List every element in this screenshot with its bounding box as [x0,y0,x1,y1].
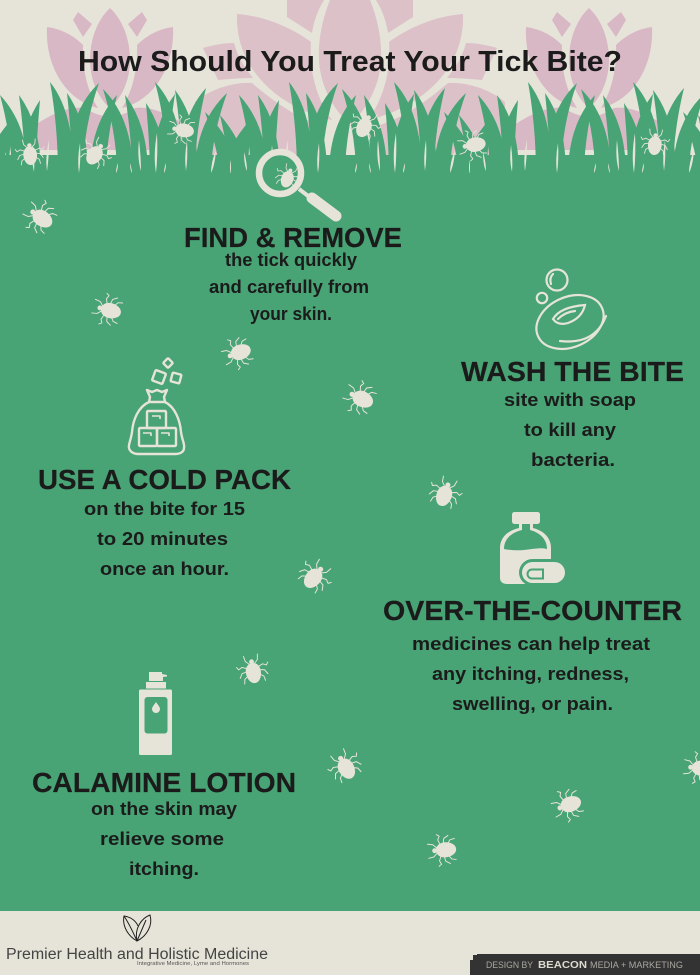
panel: calamine lotion [32,672,296,879]
designer credit bar: DESIGN BY [486,960,533,970]
title: How Should You Treat Your Tick Bite? [78,46,622,78]
lotus centre [195,0,505,175]
text block: medicines can help treat [412,634,650,654]
icon: ice bag [129,358,184,454]
footer band [0,911,700,975]
text block: and carefully from [209,277,369,297]
text block: the tick quickly [225,250,357,270]
icon: soap and bubbles [528,270,612,359]
text block [209,250,369,324]
text block: relieve some [100,829,224,849]
panel: wash the bite [461,270,684,470]
grass [0,82,700,178]
text block: on the skin may [91,799,237,819]
text block: on the bite for 15 [84,499,245,519]
text block [84,499,245,579]
text block: swelling, or pain. [452,694,613,714]
icon: magnifying glass [259,152,336,216]
icon: medicine bottle and pill [500,512,568,586]
clinic name: Premier Health and Holistic Medicine [6,946,268,963]
designer credit bar [470,953,700,975]
heading: OVER-THE-COUNTER [383,595,682,626]
lotus left [35,8,185,150]
text block: itching. [129,859,199,879]
icon: leaf logo [124,915,151,941]
text block: to 20 minutes [97,529,228,549]
heading: USE A COLD PACK [38,464,291,495]
designer credit bar: MEDIA + MARKETING [590,960,683,970]
icon: lotion bottle [139,672,172,755]
text block [412,634,650,714]
clinic tagline: Integrative Medicine, Lyme and Hormones [137,961,250,967]
heading: FIND & REMOVE [184,222,402,253]
heading: WASH THE BITE [461,356,684,387]
text block [504,390,636,470]
panel: find and remove [184,152,402,324]
text block: any itching, redness, [432,664,629,684]
green field [0,173,700,911]
text block: to kill any [524,420,616,440]
panel: over-the-counter [383,512,682,714]
footer logo [6,915,268,967]
scattered ticks [14,105,700,867]
text block [91,799,237,879]
text block: once an hour. [100,559,229,579]
heading: CALAMINE LOTION [32,767,296,798]
designer credit bar: BEACON [538,960,587,971]
panel: use a cold pack [38,358,291,579]
text block: bacteria. [531,450,615,470]
lotus right [514,8,664,150]
text block: your skin. [250,304,332,324]
text block: site with soap [504,390,636,410]
